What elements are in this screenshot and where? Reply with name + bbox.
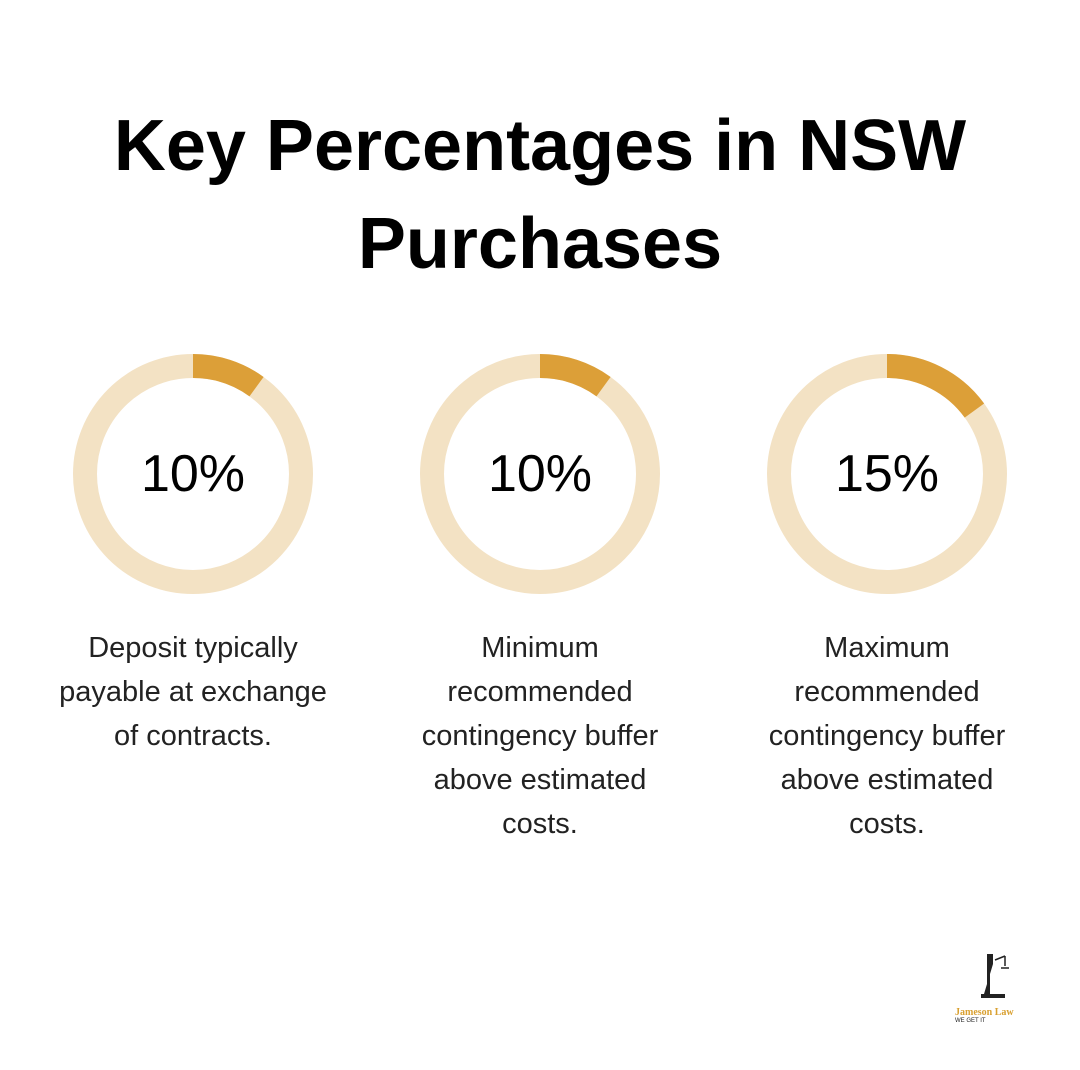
- description 2: [422, 632, 658, 840]
- description 2: costs.: [502, 808, 578, 840]
- description 1: [59, 632, 327, 752]
- title: [114, 106, 966, 284]
- title: Purchases: [358, 204, 722, 284]
- description 1: payable at exchange: [59, 676, 327, 708]
- ring 1: 10%: [141, 445, 245, 503]
- description 2: above estimated: [434, 764, 646, 796]
- ring 2: [420, 354, 660, 594]
- description 3: above estimated: [781, 764, 993, 796]
- ring 1: [73, 354, 313, 594]
- description 2: recommended: [447, 676, 633, 708]
- description 1: Deposit typically: [88, 632, 298, 664]
- logo: [955, 954, 1014, 1024]
- description 3: [769, 632, 1005, 840]
- description 3: Maximum: [824, 632, 950, 664]
- description 3: contingency buffer: [769, 720, 1005, 752]
- ring 3: 15%: [835, 445, 939, 503]
- description 3: recommended: [794, 676, 980, 708]
- logo: WE GET IT: [955, 1018, 986, 1024]
- description 2: Minimum: [481, 632, 599, 664]
- description 3: costs.: [849, 808, 925, 840]
- ring 3: [767, 354, 1007, 594]
- description 2: contingency buffer: [422, 720, 658, 752]
- description 1: of contracts.: [114, 720, 272, 752]
- logo: Jameson Law: [955, 1007, 1014, 1018]
- ring 2: 10%: [488, 445, 592, 503]
- title: Key Percentages in NSW: [114, 106, 966, 186]
